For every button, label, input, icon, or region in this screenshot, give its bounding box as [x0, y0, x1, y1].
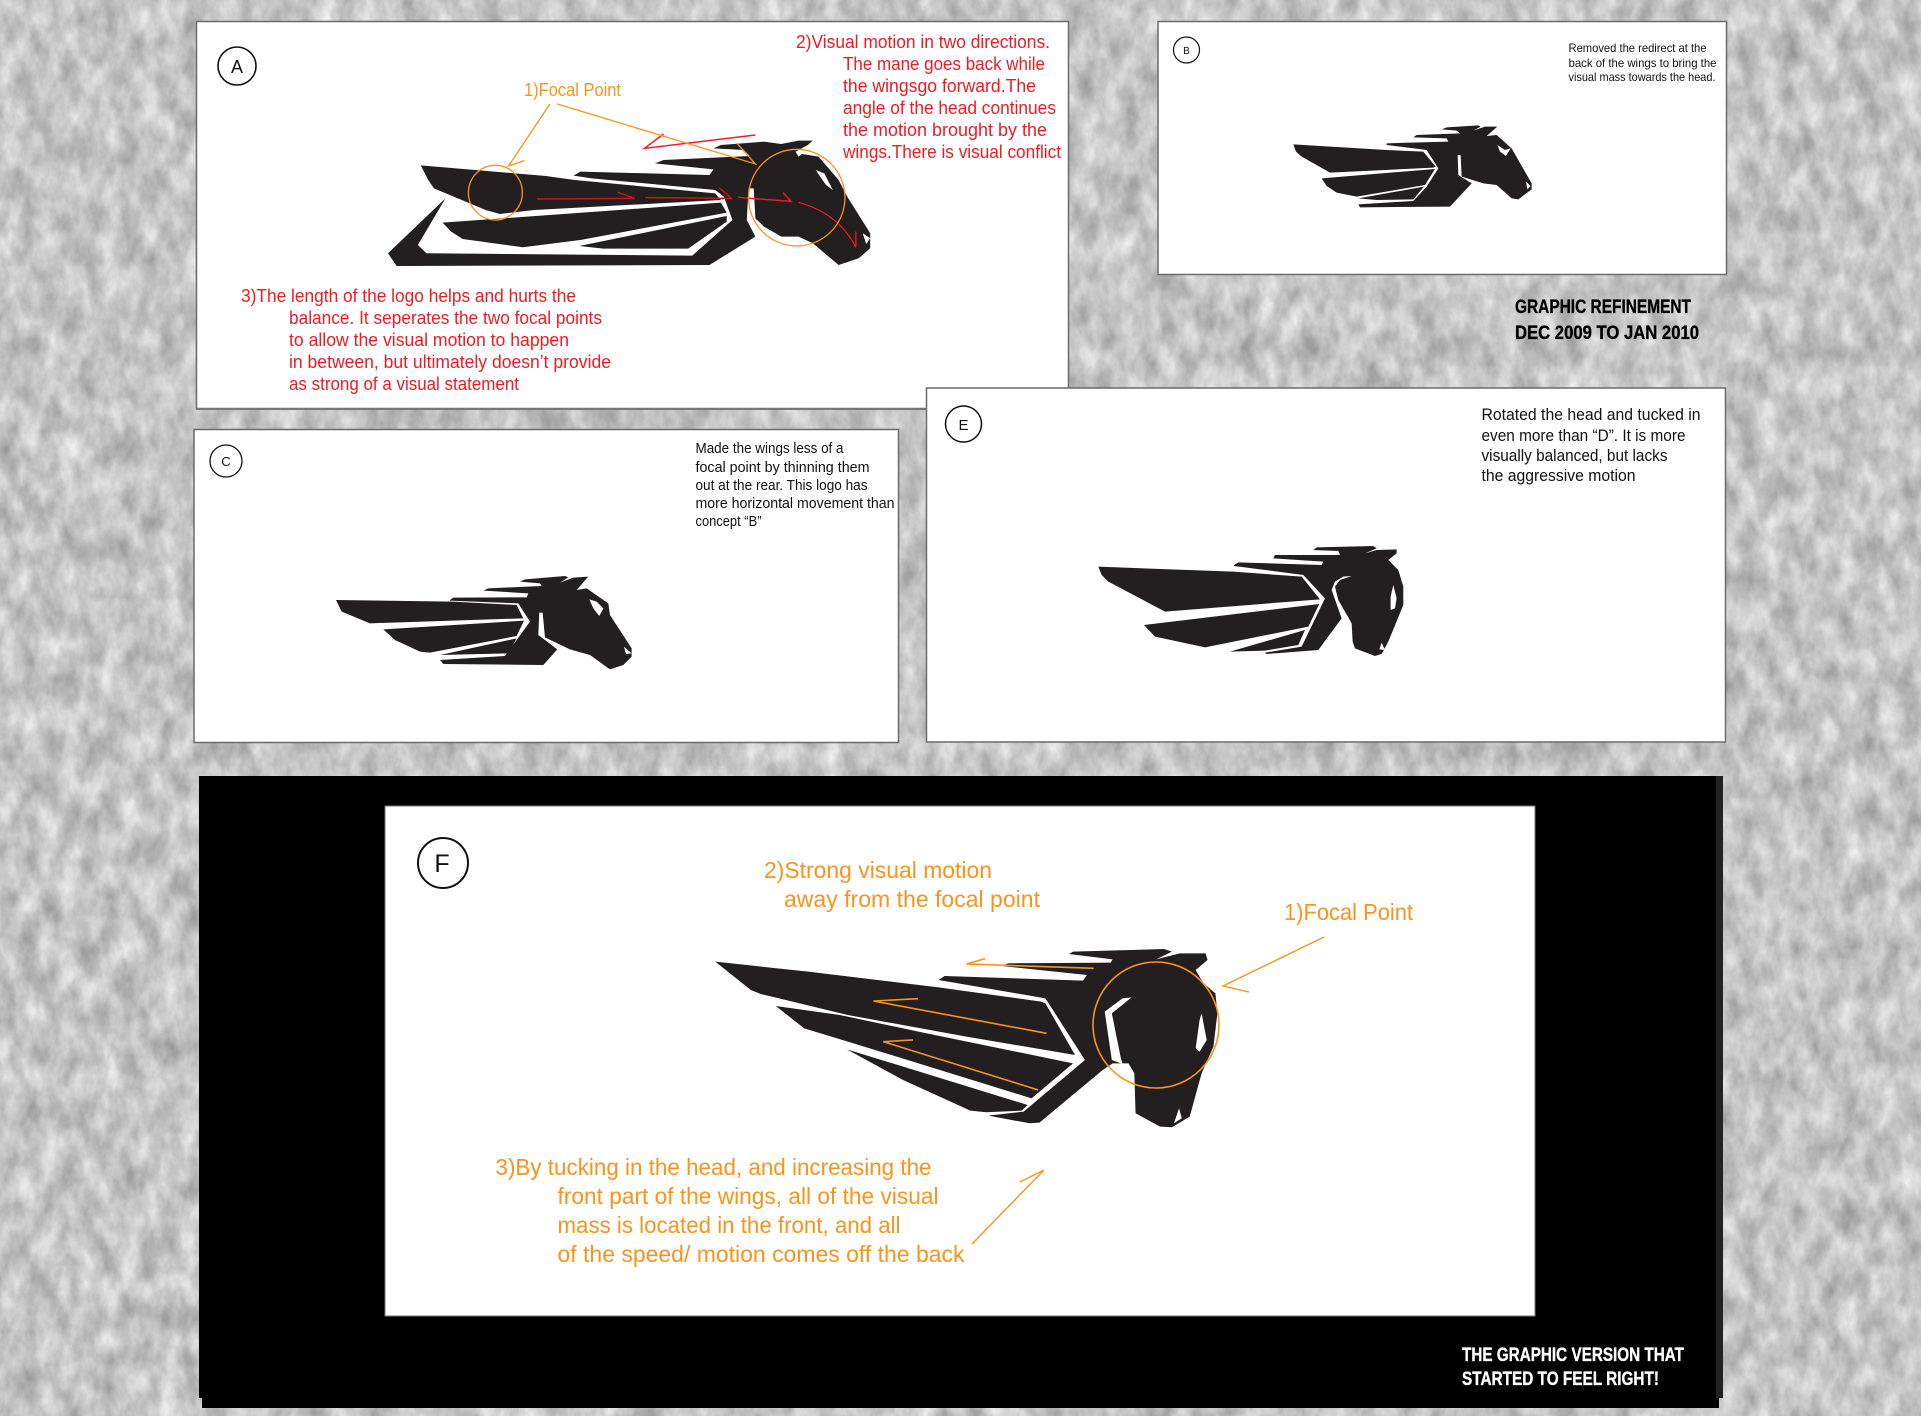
logo C: winged horse	[336, 576, 632, 669]
panel A card	[196, 22, 1068, 408]
note E: Rotated the head and tucked in	[1482, 406, 1700, 424]
badge B: B	[1183, 46, 1190, 57]
caption: graphic version: THE GRAPHIC VERSION THAT	[1462, 1345, 1684, 1366]
logo A: winged horse	[388, 141, 870, 266]
note 2: visual motion	[796, 31, 1061, 162]
note C: out at the rear. This logo has	[696, 478, 868, 494]
note C: more horizontal movement than	[696, 496, 894, 512]
note F3: tucking the head: of the speed/ motion comes off the back	[558, 1241, 965, 1267]
note B: back of the wings to bring the	[1568, 56, 1717, 70]
note 3: length of logo: as strong of a visual statement	[289, 373, 519, 394]
note F3: tucking the head: 3)By tucking in the head, and increasing the	[496, 1154, 932, 1180]
panel: E	[926, 388, 1726, 742]
note F2: strong visual motion	[764, 857, 1040, 912]
note 3: length of logo: to allow the visual motion to happen	[289, 329, 569, 350]
badge C: C	[221, 454, 231, 469]
annotation: arrow to focal point	[1223, 937, 1324, 992]
heading: graphic refinement	[1515, 297, 1699, 344]
note 3: length of logo	[241, 285, 611, 394]
panel F card	[385, 806, 1535, 1316]
note 2: visual motion: the motion brought by the	[843, 119, 1047, 140]
note F2: strong visual motion: away from the focal point	[784, 886, 1040, 912]
note F3: tucking the head: front part of the wings, all of the visual	[558, 1183, 938, 1209]
heading: graphic refinement: GRAPHIC REFINEMENT	[1515, 297, 1691, 318]
label: 1) focal point A: 1)Focal Point	[524, 79, 621, 100]
panel: F on black	[199, 776, 1723, 1408]
note E: visually balanced, but lacks	[1482, 447, 1668, 465]
dark edge strip	[1716, 776, 1723, 1398]
annotation: orange motion arrows F	[873, 959, 1094, 1090]
note E: the aggressive motion	[1482, 467, 1636, 485]
logo F: winged horse	[715, 949, 1217, 1127]
panel B card	[1158, 22, 1726, 274]
note F2: strong visual motion: 2)Strong visual motion	[764, 857, 992, 883]
note E	[1482, 406, 1700, 485]
note 3: length of logo: in between, but ultimately doesn’t provide	[289, 351, 611, 372]
note F3: tucking the head	[496, 1154, 965, 1267]
panel E card	[926, 388, 1726, 742]
heading: graphic refinement: DEC 2009 TO JAN 2010	[1515, 323, 1699, 344]
note 2: visual motion: wings.There is visual conflict	[842, 141, 1061, 162]
note C: Made the wings less of a	[696, 441, 844, 457]
note 3: length of logo: balance. It seperates the two focal points	[289, 307, 602, 328]
badge A: A	[231, 57, 243, 77]
note 2: visual motion: angle of the head continues	[843, 97, 1056, 118]
note E: even more than “D”. It is more	[1482, 427, 1686, 445]
badge F: F	[434, 850, 450, 878]
badge E	[946, 406, 982, 442]
panel A bottom shadow edge	[196, 408, 1069, 410]
label: 1) focal point F: 1)Focal Point	[1284, 899, 1413, 925]
black backing panel	[199, 776, 1723, 1408]
logo B: winged horse	[1293, 125, 1532, 207]
note 2: visual motion: the wingsgo forward.The	[843, 75, 1036, 96]
note 3: length of logo: 3)The length of the logo helps and hurts the	[241, 285, 576, 306]
note 2: visual motion: The mane goes back while	[843, 53, 1045, 74]
caption: graphic version: STARTED TO FEEL RIGHT!	[1462, 1369, 1659, 1390]
note F3: tucking the head: mass is located in the front, and all	[558, 1212, 900, 1238]
caption: graphic version	[1462, 1345, 1684, 1390]
badge B	[1174, 37, 1200, 63]
panel C card	[194, 430, 898, 742]
panel: B	[1158, 22, 1726, 274]
note C: concept “B”	[696, 514, 762, 530]
logo E: winged horse	[1098, 546, 1403, 656]
note B: visual mass towards the head.	[1568, 70, 1716, 84]
badge C	[210, 445, 242, 477]
badge F	[418, 838, 468, 888]
annotation: red motion arrows A	[537, 134, 856, 247]
note 2: visual motion: 2)Visual motion in two directions.	[796, 31, 1050, 52]
panel: C	[194, 430, 898, 742]
note B	[1568, 41, 1717, 84]
note B: Removed the redirect at the	[1568, 41, 1707, 55]
panel: A	[196, 22, 1069, 410]
note C: focal point by thinning them	[696, 460, 870, 476]
badge E: E	[958, 417, 969, 434]
annotation: focal circle F	[1093, 962, 1219, 1088]
annotation: orange focal circles and arrows A	[468, 104, 845, 246]
annotation: arrow to wing front	[972, 1170, 1044, 1244]
badge A	[218, 47, 256, 85]
note C	[696, 441, 894, 530]
